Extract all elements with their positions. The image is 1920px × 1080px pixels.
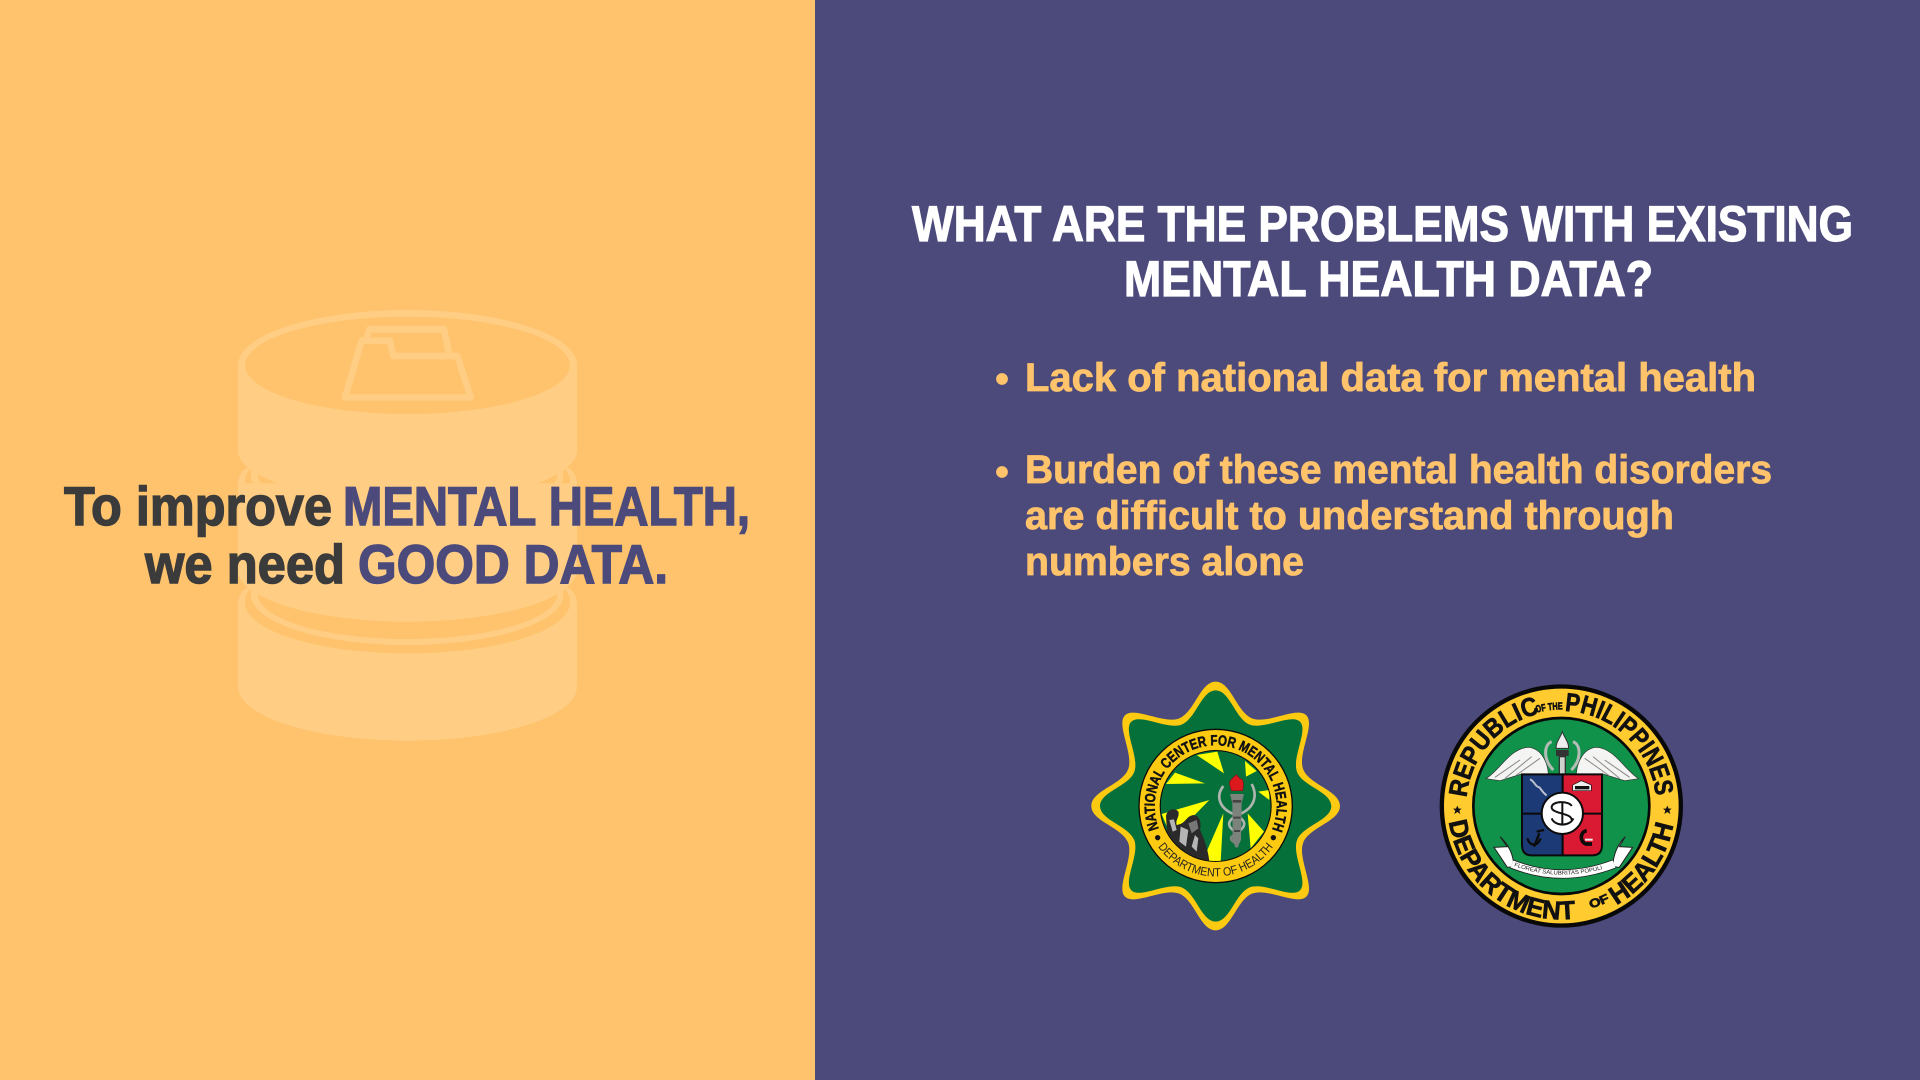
logo: National Center for Mental Health: DEPARTMENT OF HEALTH [1158, 842, 1273, 876]
bullet list: problems: Lack of national data for mental health [1025, 356, 1756, 400]
logo: Republic of the Philippines Department of Health: OF THE [1536, 702, 1563, 712]
logo: National Center for Mental Health [1091, 682, 1340, 930]
logo: Republic of the Philippines Department of Health: DEPARTMENT [1448, 819, 1575, 920]
bullet list: problems: numbers alone [1025, 540, 1304, 584]
logo: Republic of the Philippines Department of Health: PHILIPPINES [1566, 692, 1674, 795]
icon: database watermark [238, 310, 577, 741]
bullet list: problems: Burden of these mental health disorders [1025, 448, 1772, 492]
text: main statement: To improve [64, 475, 332, 537]
heading: problems with existing data [912, 196, 1853, 307]
logo: National Center for Mental Health: NATIONAL CENTER FOR MENTAL HEALTH [1144, 734, 1287, 833]
bullet list: problems: are difficult to understand through [1025, 494, 1674, 538]
heading: problems with existing data: MENTAL HEALTH DATA? [1124, 251, 1653, 307]
logo: Republic of the Philippines Department of Health: OF [1589, 893, 1608, 908]
logo: Republic of the Philippines Department of Health: REPUBLIC [1448, 697, 1538, 796]
text: main statement [64, 475, 750, 595]
text: main statement: we need [144, 533, 345, 595]
logo: Republic of the Philippines Department of Health [1440, 684, 1683, 928]
logo: Republic of the Philippines Department of Health: FLOREAT SALUBRITAS POPULI [1514, 862, 1602, 875]
text: main statement: MENTAL HEALTH, [343, 475, 750, 537]
bullet list: problems [996, 356, 1772, 584]
logo: Republic of the Philippines Department of Health: HEALTH [1608, 822, 1674, 905]
panel: left background [0, 0, 815, 1080]
panel: right background [815, 0, 1920, 1080]
text: main statement: GOOD DATA. [358, 533, 668, 595]
